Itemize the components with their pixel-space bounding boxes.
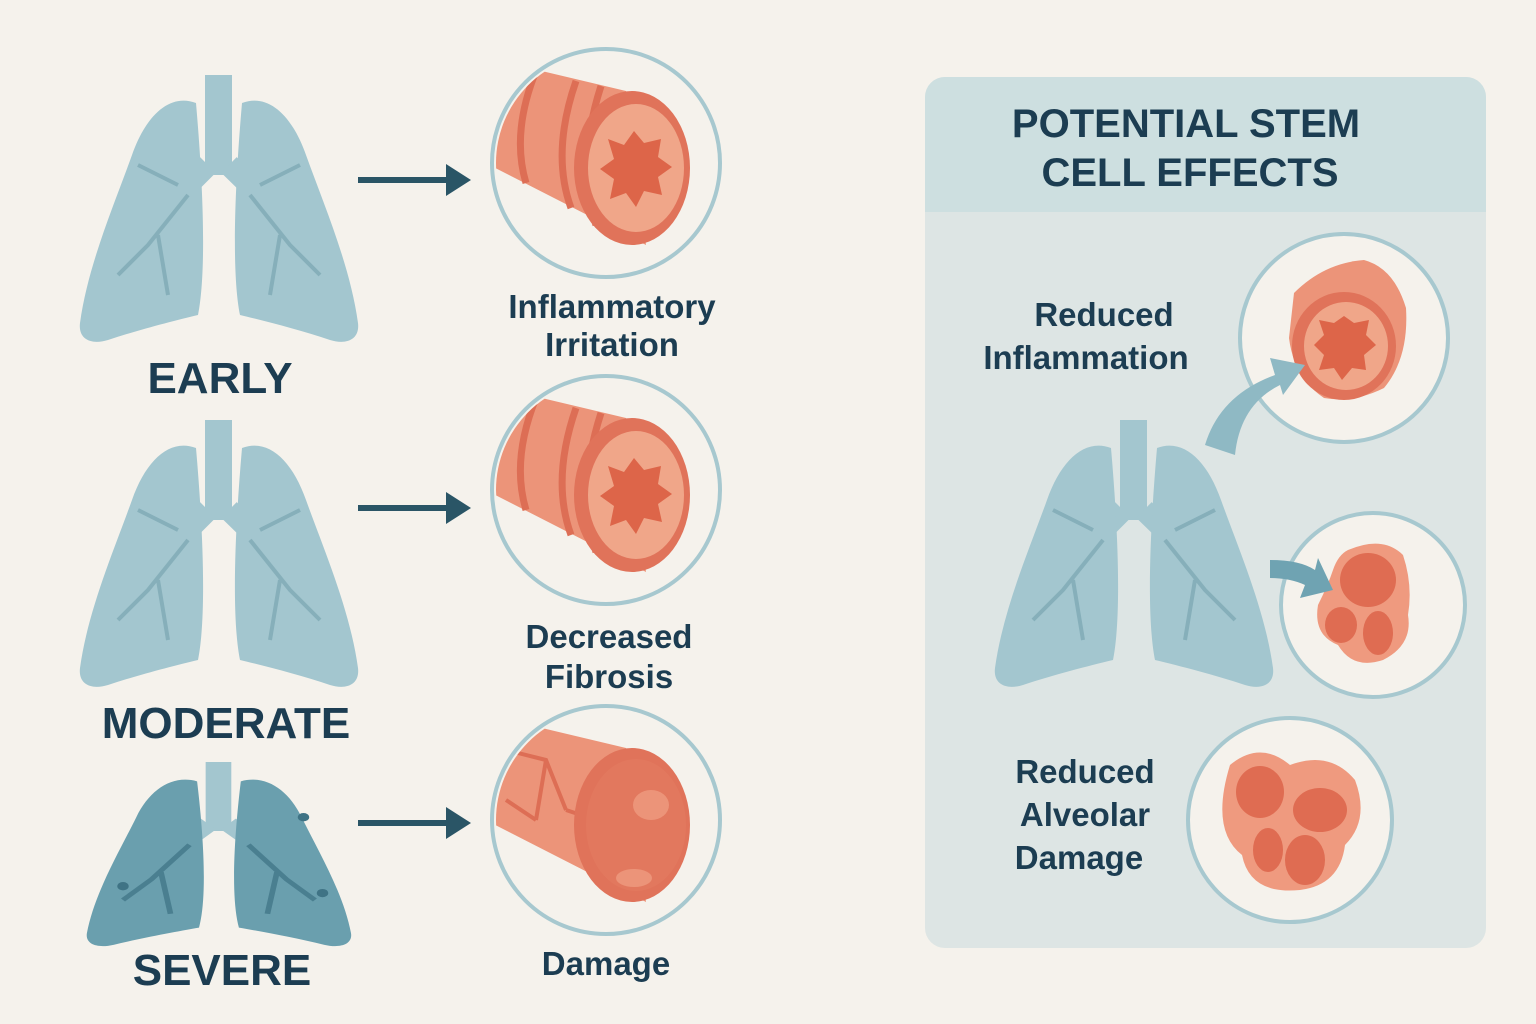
label: Decreased Fibrosis: Fibrosis — [545, 658, 673, 695]
circle: alveoli — [1281, 513, 1465, 697]
label: Reduced Alveolar Damage: Alveolar — [1020, 796, 1150, 833]
lungs: severe — [87, 762, 351, 946]
arrow: to alveoli — [1270, 558, 1333, 598]
circle: alveolar damage — [1188, 718, 1392, 922]
label: Reduced Inflammation: Reduced — [1034, 296, 1174, 333]
arrow: early — [358, 164, 471, 196]
label: Reduced Alveolar Damage: Damage — [1015, 839, 1143, 876]
lungs: treated — [995, 420, 1273, 687]
arrow: moderate — [358, 492, 471, 524]
panel title: POTENTIAL STEM — [1012, 102, 1360, 146]
label: Reduced Inflammation: Inflammation — [983, 339, 1189, 376]
panel title: CELL EFFECTS — [1041, 151, 1339, 195]
label: EARLY: EARLY — [147, 354, 293, 403]
label: Damage: Damage — [542, 945, 670, 982]
arrow: to reduced inflammation — [1205, 358, 1305, 455]
panel: stem cell effects — [925, 77, 1486, 948]
icon: airway damage — [466, 706, 720, 934]
label: Reduced Alveolar Damage: Reduced — [1015, 753, 1155, 790]
label: SEVERE: SEVERE — [133, 946, 311, 995]
circle: reduced inflammation airway — [1240, 234, 1448, 442]
label: MODERATE: MODERATE — [102, 699, 350, 748]
lungs: moderate — [80, 420, 358, 687]
label: Inflammatory Irritation: Irritation — [545, 326, 679, 363]
lungs: early — [80, 75, 358, 342]
icon: airway fibrosis — [466, 376, 720, 604]
label: Inflammatory Irritation: Inflammatory — [508, 288, 716, 325]
icon: airway inflamed — [466, 49, 720, 277]
label: Decreased Fibrosis: Decreased — [526, 618, 692, 655]
arrow: severe — [358, 807, 471, 839]
